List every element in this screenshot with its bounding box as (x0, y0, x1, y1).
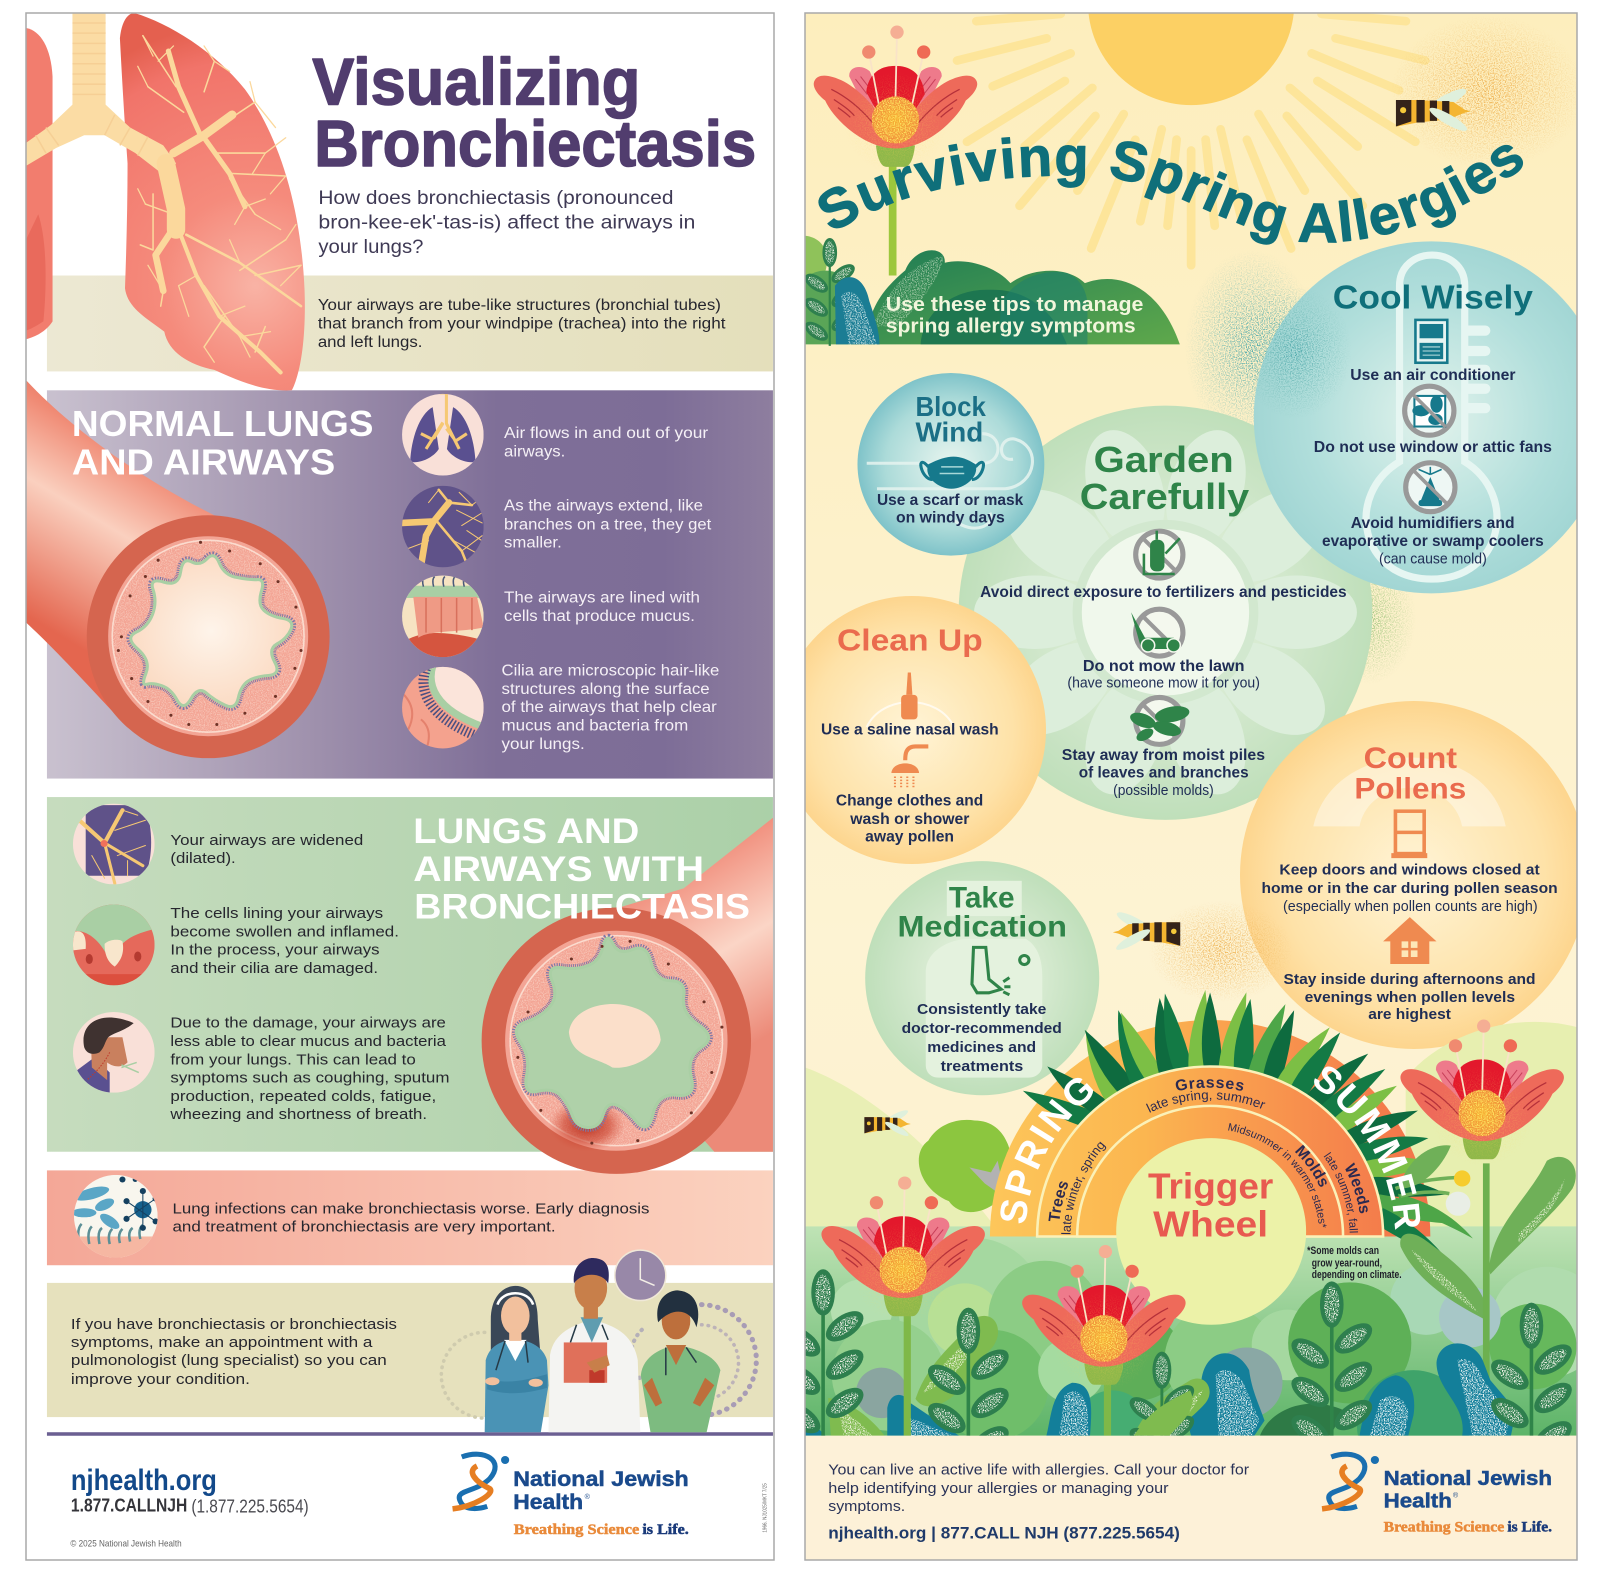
text: stay inside: Stay inside during afternoons and (1284, 971, 1536, 988)
icon: inhaler (972, 947, 1029, 995)
heading: Wind (915, 416, 983, 447)
foreground plants (777, 1157, 1577, 1489)
contact details: (1.877.225.5654) (191, 1496, 309, 1516)
decorative ring (867, 702, 954, 727)
logo: National Jewish Health: is Life. (1507, 1520, 1552, 1536)
contact details: © 2025 National Jewish Health (70, 1539, 182, 1549)
speckled pollen by bee (1149, 901, 1293, 1002)
icon: air conditioner (1415, 320, 1447, 363)
text: appointment: improve your condition. (71, 1371, 250, 1388)
text: stay inside (1284, 971, 1536, 1023)
bee (864, 1108, 911, 1138)
panel: Block Wind (857, 373, 1044, 556)
flower: center (1022, 1245, 1186, 1436)
text: airways extend: branches on a tree, they get (504, 517, 712, 534)
intro band (47, 276, 773, 371)
text: cilia: Cilia are microscopic hair-like (502, 663, 719, 680)
text: lined with cells (504, 590, 700, 625)
heading: Carefully (1080, 477, 1249, 517)
heading: normal lungs and airways: AND AIRWAYS (72, 442, 335, 482)
trigger labels: Molds (1295, 1144, 1327, 1187)
footer text: symptoms. (828, 1499, 905, 1515)
icon: lawn mower (1131, 609, 1183, 656)
text: Use a scarf or mask (877, 492, 1024, 509)
text: humidifiers: evaporative or swamp coolers (1322, 533, 1544, 550)
lower part of bronchiectasis panel (47, 797, 773, 1549)
text: doctor-recommended (902, 1020, 1062, 1037)
text: air flows (504, 425, 708, 461)
heading: Block (915, 391, 986, 422)
text: lined with cells: cells that produce mucus. (504, 608, 695, 625)
heading: Garden (1094, 440, 1234, 480)
bee (1396, 85, 1471, 135)
heading: Pollens (1354, 773, 1466, 806)
pollen speckles (1185, 15, 1585, 684)
tree (919, 1120, 1046, 1212)
text: appointment: If you have bronchiectasis or bronchiectasis (71, 1316, 397, 1333)
text: moist piles: of leaves and branches (1079, 765, 1249, 782)
text: lawn: Do not mow the lawn (1083, 658, 1245, 675)
text: infections: and treatment of bronchiectasis are very important. (172, 1219, 556, 1235)
season labels: SPRING (1000, 1078, 1094, 1224)
footnote: grow year-round, (1312, 1258, 1382, 1270)
heading (898, 882, 1067, 943)
text: shower: Change clothes and (836, 793, 983, 810)
text: lined with cells: The airways are lined with (504, 590, 700, 607)
logo: National Jewish Health: Breathing Science (514, 1521, 640, 1538)
text: airways extend: As the airways extend, like (504, 498, 703, 515)
text: air conditioner: Use an air conditioner (1350, 367, 1516, 384)
logo: National Jewish Health: Health (513, 1490, 583, 1514)
heading: lungs and airways with bronchiectasis (414, 818, 748, 919)
icon: leaves (1128, 697, 1191, 744)
logo: National Jewish Health: is Life. (642, 1521, 689, 1538)
print code: 1966. NJ1025/MKT 7/25 (762, 1483, 768, 1533)
heading: Clean Up (837, 623, 983, 657)
infection band (47, 1170, 773, 1265)
contact details: 1.877.CALLNJH (71, 1495, 187, 1515)
text: fans: Do not use window or attic fans (1314, 439, 1552, 456)
text: lawn (1067, 658, 1260, 692)
text: appointment (71, 1316, 397, 1388)
text: airways extend: smaller. (504, 534, 562, 551)
text: shower: away pollen (865, 828, 954, 845)
text: symptoms: symptoms such as coughing, sputum (170, 1070, 449, 1087)
panel: Cool Wisely (1239, 241, 1605, 593)
footnote (1307, 1245, 1402, 1281)
text: air flows: airways. (504, 444, 565, 461)
text: symptoms: Due to the damage, your airways are (170, 1015, 446, 1032)
grass (1018, 989, 1454, 1266)
lime leaf and dandelion (1395, 1145, 1473, 1239)
panel background (805, 13, 1577, 1560)
icon: nasal spray (901, 672, 918, 719)
panel: Surviving Spring Allergies (806, 14, 1576, 1560)
logo: National Jewish Health: Health (1384, 1491, 1452, 1512)
flower: left (821, 1176, 985, 1436)
speckle on circle (1239, 286, 1352, 418)
footnote: depending on climate. (1312, 1269, 1402, 1281)
hills and tagline: Use these tips to manage (886, 293, 1143, 316)
text: lawn: (have someone mow it for you) (1067, 676, 1260, 692)
illustration: lungs (26, 13, 305, 390)
logo: National Jewish Health: National Jewish (1384, 1468, 1552, 1490)
text: humidifiers: (can cause mold) (1379, 551, 1487, 567)
thermometer (1366, 255, 1497, 579)
illustration: normal airway cross-section (26, 380, 330, 758)
text: cilia: mucus and bacteria from (502, 718, 688, 735)
logo: National Jewish Health (453, 1454, 689, 1538)
panel: Visualizing Bronchiectasis (26, 13, 774, 1560)
panel: Clean Up (778, 596, 1046, 864)
text: appointment: pulmonologist (lung specialist) so you can (71, 1352, 387, 1369)
contact details (70, 1464, 309, 1549)
text: swollen cells (170, 905, 399, 977)
text: doors and windows: home or in the car during pollen season (1261, 880, 1558, 897)
icon: cilia (402, 663, 484, 750)
logo: National Jewish Health: ® (585, 1493, 591, 1501)
title (312, 56, 754, 168)
text: treatments (941, 1058, 1023, 1075)
hills and tagline (801, 236, 1180, 346)
panel: Take Medication (865, 861, 1099, 1095)
icon: coughing man (73, 1012, 155, 1093)
text: infections: Lung infections can make bronchiectasis worse. Early diagnosis (172, 1200, 650, 1217)
text: symptoms: production, repeated colds, fatigue, (170, 1088, 436, 1105)
heading: trigger wheel: Wheel (1153, 1204, 1268, 1244)
season labels: SUMMER (1314, 1066, 1420, 1230)
text: humidifiers (1322, 515, 1544, 567)
heading (915, 391, 986, 447)
heading: lungs and airways with bronchiectasis: BRONCHIECTASIS (414, 887, 750, 927)
trigger labels: late spring, summer (1146, 1090, 1266, 1113)
text: airways extend (504, 498, 712, 551)
logo: National Jewish Health: National Jewish (513, 1467, 689, 1491)
contact details: njhealth.org (71, 1464, 217, 1497)
icon: mask (921, 457, 983, 489)
icon: window (1391, 811, 1427, 856)
icon: humidifier (1406, 463, 1455, 512)
sun rays (957, 14, 1425, 265)
intro text (318, 297, 726, 351)
subtitle (318, 187, 695, 258)
bee (1113, 909, 1180, 953)
text: Consistently take (917, 1001, 1046, 1018)
footnote: *Some molds can (1307, 1245, 1379, 1257)
sun (1088, 0, 1294, 105)
text: widened: Your airways are widened (170, 832, 363, 849)
illustration: damaged airway cross-section (482, 818, 773, 1174)
appointment band (47, 1283, 773, 1417)
logo: National Jewish Health (1322, 1454, 1552, 1536)
text: symptoms: wheezing and shortness of breath. (169, 1106, 427, 1123)
trigger wheel (990, 990, 1473, 1325)
text: humidifiers: Avoid humidifiers and (1351, 515, 1515, 532)
icon: widened airway (73, 804, 155, 884)
text: saline: Use a saline nasal wash (821, 722, 999, 739)
subtitle: your lungs? (318, 236, 424, 258)
footer text: help identifying your allergies or managing your (828, 1481, 1169, 1497)
icon: fan (1405, 386, 1454, 435)
top of allergies panel (806, 14, 1576, 820)
upper part of bronchiectasis panel (26, 13, 773, 779)
heading: Medication (898, 911, 1067, 943)
title: Bronchiectasis (314, 107, 756, 180)
text (902, 1001, 1062, 1075)
footer text (828, 1463, 1249, 1543)
lower scene of allergies panel (806, 861, 1576, 1559)
trigger labels: Weeds (1345, 1162, 1370, 1214)
intro text: Your airways are tube-like structures (bronchial tubes) (318, 297, 721, 314)
heading: normal lungs and airways: NORMAL LUNGS (72, 404, 373, 444)
trigger labels: late summer, fall (1324, 1152, 1358, 1233)
heading (1080, 440, 1249, 517)
flower: top left (814, 26, 977, 276)
title: Visualizing (312, 46, 640, 120)
text: doors and windows: (especially when pollen counts are high) (1283, 899, 1538, 915)
heading: lungs and airways with bronchiectasis: LUNGS AND (413, 811, 639, 851)
text: symptoms: from your lungs. This can lead to (170, 1052, 416, 1068)
intro text: that branch from your windpipe (trachea) into the right (318, 316, 726, 333)
season labels (1000, 1066, 1420, 1230)
background hills (805, 1022, 1604, 1481)
footer text: You can live an active life with allergies. Call your doctor for (828, 1463, 1249, 1479)
heading: trigger wheel (1148, 1166, 1273, 1244)
decorative arch (1313, 757, 1506, 826)
text: widened (170, 832, 363, 867)
icon: airway branches (402, 486, 484, 567)
text: widened: (dilated). (170, 850, 236, 867)
bronchiectasis band (47, 797, 773, 1152)
text: swollen cells: become swollen and inflamed. (170, 923, 399, 940)
text: symptoms (169, 1015, 449, 1123)
panel: Count Pollens (1240, 701, 1588, 1049)
text: cilia: your lungs. (502, 736, 585, 753)
text: fertilizers: Avoid direct exposure to fertilizers and pesticides (980, 584, 1347, 601)
text: cilia (502, 663, 719, 753)
trigger labels (1048, 1079, 1370, 1234)
footer band (805, 1436, 1577, 1562)
subtitle: How does bronchiectasis (pronounced (318, 187, 673, 209)
hills and tagline: spring allergy symptoms (886, 315, 1136, 338)
footer text: njhealth.org | 877.CALL NJH (877.225.5654) (828, 1524, 1180, 1543)
text: doors and windows: Keep doors and windows closed at (1279, 862, 1540, 879)
subtitle: bron-kee-ek'-tas-is) affect the airways in (318, 212, 695, 234)
heading: trigger wheel: Trigger (1148, 1166, 1273, 1207)
logo: National Jewish Health: Breathing Science (1384, 1520, 1505, 1536)
panel: Garden Carefully (959, 406, 1372, 820)
text: swollen cells: and their cilia are damaged. (170, 960, 378, 977)
text: appointment: symptoms, make an appointment with a (71, 1334, 373, 1351)
divider line (47, 1432, 773, 1436)
text: moist piles: (possible molds) (1113, 783, 1214, 799)
text: shower (836, 793, 983, 845)
heading: Cool Wisely (1333, 279, 1533, 317)
icon: sprayer (1136, 531, 1183, 578)
heading: normal lungs and airways (72, 410, 372, 475)
text: moist piles: Stay away from moist piles (1062, 747, 1265, 764)
text: infections (172, 1200, 650, 1235)
logo: National Jewish Health: ® (1453, 1491, 1459, 1499)
illustration: care team (441, 1250, 756, 1432)
text: swollen cells: The cells lining your airways (170, 905, 384, 922)
intro text: and left lungs. (318, 334, 422, 351)
text: moist piles (1062, 747, 1265, 799)
text: symptoms: less able to clear mucus and bacteria (170, 1033, 446, 1050)
outer ring (990, 1020, 1430, 1236)
text (877, 492, 1024, 526)
trigger labels: Midsummer in warmer states* (1228, 1123, 1326, 1228)
flower: right (1400, 1020, 1564, 1166)
trigger labels: Grasses (1176, 1079, 1244, 1091)
heading: Count (1364, 742, 1457, 775)
icon: small lungs (402, 393, 484, 476)
text: doors and windows (1261, 862, 1558, 915)
title: Surviving Spring Allergies (818, 137, 1524, 245)
icon: inflamed cells (73, 905, 155, 987)
text: cilia: of the airways that help clear (502, 699, 717, 716)
middle and inner rings (1037, 1066, 1383, 1236)
trigger labels: Trees (1048, 1181, 1068, 1222)
text: air flows: Air flows in and out of your (504, 425, 708, 442)
text: stay inside: evenings when pollen levels (1305, 989, 1515, 1006)
icon: airway cells (402, 576, 484, 658)
heading (1354, 742, 1466, 806)
icon: shower (891, 746, 928, 789)
icon: germs (72, 1175, 159, 1258)
trigger labels: late winter, spring (1061, 1142, 1106, 1234)
heading: Take (949, 882, 1015, 914)
heading: lungs and airways with bronchiectasis: AIRWAYS WITH (413, 849, 704, 889)
normal lungs band (47, 390, 773, 779)
text: shower: wash or shower (849, 811, 969, 828)
text: swollen cells: In the process, your airways (170, 942, 380, 958)
text: on windy days (896, 509, 1005, 526)
icon: house (1383, 917, 1436, 964)
text: stay inside: are highest (1368, 1006, 1451, 1023)
text: cilia: structures along the surface (502, 681, 710, 698)
text: medicines and (927, 1039, 1036, 1056)
